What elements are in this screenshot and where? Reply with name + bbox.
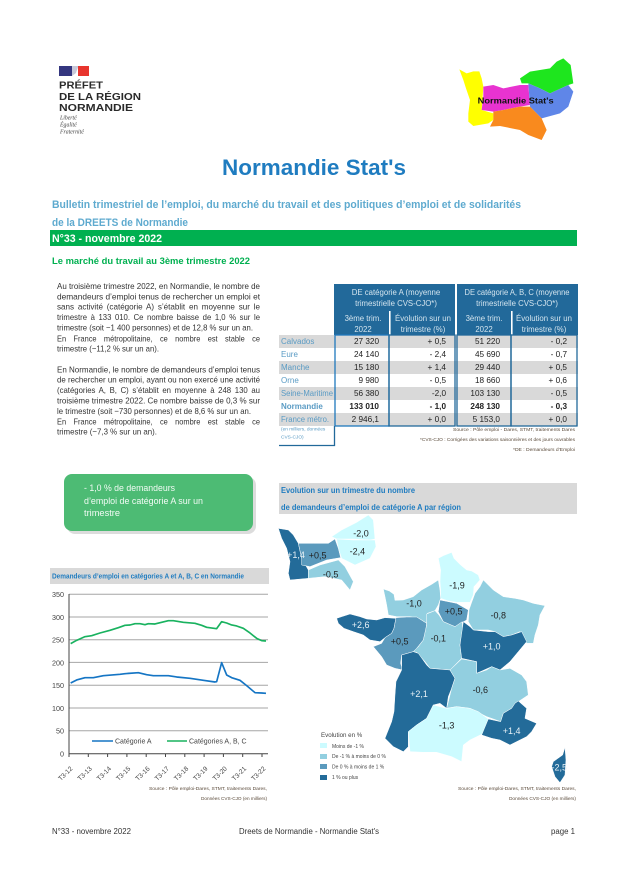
line chart: T3-22 bbox=[250, 765, 268, 783]
footer: Dreets de Normandie - Normandie Stat's bbox=[239, 827, 379, 836]
footer: N°33 - novembre 2022 bbox=[52, 827, 131, 836]
data table: + 0,0 bbox=[428, 415, 446, 424]
logo: Préfet de la région Normandie bbox=[59, 66, 141, 136]
map source bbox=[458, 786, 576, 802]
data table: 45 690 bbox=[475, 350, 500, 359]
logo: Préfet de la région Normandie: Égalité bbox=[59, 120, 77, 128]
data table: 103 130 bbox=[470, 389, 500, 398]
chart title: Demandeurs d’emploi en catégories A et A, B, C en Normandie bbox=[52, 572, 244, 580]
text block: labour market commentary: En France métropolitaine, ce nombre est stable ce bbox=[57, 416, 260, 426]
data table: - 2,4 bbox=[430, 350, 446, 359]
line chart: 150 bbox=[52, 681, 64, 690]
text block: labour market commentary: En France métropolitaine, ce nombre est stable ce bbox=[57, 333, 260, 343]
footer: page 1 bbox=[551, 827, 575, 836]
data table: Évolution sur un bbox=[516, 314, 572, 323]
line chart: 350 bbox=[52, 590, 64, 599]
map title bbox=[279, 483, 577, 514]
line chart: 200 bbox=[52, 658, 64, 668]
data table: - 0,7 bbox=[551, 350, 567, 359]
data table: + 0,5 bbox=[428, 337, 446, 346]
data table: 15 180 bbox=[354, 363, 379, 372]
subtitle: de la DREETS de Normandie bbox=[52, 217, 188, 229]
line chart: 100 bbox=[52, 704, 64, 713]
choropleth maps of Normandy and France bbox=[278, 515, 567, 783]
line chart: T3-14 bbox=[96, 765, 113, 783]
map value labels: -1,0 bbox=[406, 599, 422, 609]
logo: Préfet de la région Normandie: NORMANDIE bbox=[59, 103, 133, 114]
map value labels: +1,0 bbox=[483, 641, 501, 651]
title: Normandie Stat's bbox=[222, 155, 406, 180]
data table: 27 320 bbox=[354, 337, 379, 346]
callout bbox=[64, 474, 256, 534]
logo: Normandie Stat's map bbox=[459, 58, 573, 140]
data table: Manche bbox=[281, 363, 310, 372]
map legend: De 0 % à moins de 1 % bbox=[332, 764, 385, 770]
line chart: 50 bbox=[56, 726, 64, 736]
line chart: 250 bbox=[52, 636, 64, 644]
table sources: Source : Pôle emploi - Dares, STMT, traitements Dares bbox=[453, 427, 576, 433]
data table: Évolution sur un bbox=[395, 314, 451, 323]
data table: Seine-Maritime bbox=[281, 389, 334, 398]
data table: trimestre (%) bbox=[522, 325, 567, 334]
data table: trimestrielle CVS-CJO*) bbox=[355, 299, 437, 308]
section heading: Le marché du travail au 3ème trimestre 2022 bbox=[52, 256, 250, 267]
logo: Normandie Stat's map: Normandie Stat's bbox=[478, 95, 554, 105]
data table: DE catégorie A, B, C (moyenne bbox=[464, 288, 570, 297]
map value labels: -1,9 bbox=[449, 580, 465, 590]
data table: 9 980 bbox=[358, 376, 379, 385]
text block: labour market commentary: demandeurs d’emploi tenus de rechercher un emploi et bbox=[57, 291, 261, 301]
text block: labour market commentary: trimestre à 133 010. Ce nombre baisse de 1,0 % sur le bbox=[57, 312, 260, 322]
callout: trimestre bbox=[84, 508, 120, 518]
data table: Eure bbox=[281, 350, 298, 359]
line chart: T3-21 bbox=[231, 765, 248, 783]
map legend: De -1 % à moins de 0 % bbox=[332, 754, 386, 760]
text block: labour market commentary: de rechercher un emploi, ayant ou non exercé une activité bbox=[57, 374, 260, 384]
map value labels: +2,6 bbox=[352, 620, 370, 630]
data table: -2,0 bbox=[432, 389, 446, 398]
map value labels: +1,4 bbox=[503, 726, 521, 736]
data table: - 0,5 bbox=[430, 376, 446, 385]
data table: 2022 bbox=[354, 325, 372, 334]
logo: Préfet de la région Normandie: Liberté bbox=[59, 116, 77, 122]
data table: 133 010 bbox=[349, 402, 379, 411]
table sources: *CVS-CJO : Corrigées des variations saisonnières et des jours ouvrables bbox=[420, 437, 576, 443]
data table: Calvados bbox=[281, 337, 314, 346]
map source: Source : Pôle emploi-Dares, STMT, traitements Dares, bbox=[458, 786, 576, 792]
line chart: T3-13 bbox=[77, 765, 94, 783]
logo: Préfet de la région Normandie: PRÉFET bbox=[59, 78, 103, 92]
map: Normandy departments bbox=[278, 515, 376, 590]
data table: - 0,2 bbox=[551, 337, 567, 346]
map value labels: -0,8 bbox=[491, 610, 506, 620]
map legend: Evolution en % bbox=[321, 732, 363, 739]
data table: 3ème trim. bbox=[345, 314, 381, 323]
map value labels: -1,3 bbox=[439, 720, 454, 730]
map source: Données CVS-CJO (en milliers) bbox=[509, 796, 576, 802]
logo: Préfet de la région Normandie: Fraternité bbox=[59, 130, 84, 136]
data table: Orne bbox=[281, 376, 299, 385]
map value labels: -0,5 bbox=[323, 569, 338, 579]
data table: 29 440 bbox=[475, 363, 500, 372]
data table: 18 660 bbox=[475, 376, 500, 385]
line chart: T3-15 bbox=[115, 765, 133, 783]
data table: trimestre (%) bbox=[401, 325, 446, 334]
map title: de demandeurs d’emploi de catégorie A par région bbox=[281, 503, 461, 512]
data table: 248 130 bbox=[470, 402, 500, 411]
callout: - 1,0 % de demandeurs bbox=[84, 483, 176, 493]
text block: labour market commentary: trimestre (−7,3 % sur un an). bbox=[57, 427, 157, 437]
data table: 3ème trim. bbox=[466, 314, 502, 323]
map value labels: +0,5 bbox=[445, 606, 463, 616]
table sources bbox=[420, 427, 576, 453]
map value labels: -0,1 bbox=[431, 634, 446, 644]
line chart: Catégories A, B, C bbox=[189, 738, 247, 746]
data table: + 1,4 bbox=[428, 363, 446, 372]
map value labels: +0,5 bbox=[309, 550, 327, 560]
data table: 5 153,0 bbox=[473, 415, 500, 424]
data table: - 0,5 bbox=[551, 389, 567, 398]
line chart: T3-18 bbox=[173, 765, 190, 783]
data table: Normandie bbox=[281, 402, 323, 411]
map title: Evolution sur un trimestre du nombre bbox=[281, 486, 416, 495]
line chart: T3-19 bbox=[192, 765, 210, 783]
line chart: 0 bbox=[60, 750, 64, 758]
subtitle: Bulletin trimestriel de l’emploi, du marché du travail et des politiques d’emploi et de solidarités bbox=[52, 199, 521, 211]
data table: trimestrielle CVS-CJO*) bbox=[476, 299, 558, 308]
line chart: T3-17 bbox=[154, 765, 171, 783]
data table: + 0,6 bbox=[549, 376, 567, 385]
data table: 2 946,1 bbox=[352, 415, 379, 424]
table sources: *DE : Demandeurs d’Emploi bbox=[513, 447, 575, 453]
data table: + 0,5 bbox=[549, 363, 567, 372]
text block: labour market commentary: trimestre (−11,2 % sur un an). bbox=[57, 344, 159, 354]
text block: labour market commentary: (catégories A, B, C) s’établit en moyenne à 248 130 au bbox=[57, 385, 260, 395]
map legend: 1 % ou plus bbox=[332, 775, 359, 781]
data table: - 0,3 bbox=[551, 402, 567, 411]
text block: labour market commentary: le trimestre (soit −730 personnes) et de 8,6 % sur un an. bbox=[57, 406, 251, 416]
data table bbox=[279, 284, 578, 446]
data table: 24 140 bbox=[354, 350, 379, 359]
data table: (en milliers, données bbox=[281, 426, 326, 432]
text block: labour market commentary: trimestre (soit −1 400 personnes) et de 12,8 % sur un an. bbox=[57, 322, 253, 332]
data table: France métro. bbox=[281, 415, 329, 424]
map legend: Moins de -1 % bbox=[332, 744, 365, 750]
logo: Préfet de la région Normandie: DE LA RÉGION bbox=[59, 90, 141, 103]
map value labels: +1,4 bbox=[287, 550, 305, 560]
map: French regions bbox=[337, 552, 566, 783]
data table: 56 380 bbox=[354, 389, 379, 398]
text block: labour market commentary bbox=[57, 281, 261, 437]
text block: labour market commentary: sans activité (catégorie A) s’établit en moyenne sur le bbox=[57, 302, 260, 312]
data table: 51 220 bbox=[475, 337, 500, 346]
data table: 2022 bbox=[475, 325, 493, 334]
map value labels: -2,5 bbox=[552, 762, 567, 772]
map legend bbox=[320, 732, 386, 781]
subtitle bbox=[52, 199, 521, 229]
data table: + 0,0 bbox=[549, 415, 567, 424]
line chart: Catégorie A bbox=[115, 738, 152, 746]
text block: labour market commentary: En Normandie, le nombre de demandeurs d’emploi tenus bbox=[57, 364, 260, 374]
map value labels bbox=[287, 529, 567, 772]
data table: - 1,0 bbox=[430, 402, 446, 411]
line chart: T3-16 bbox=[134, 765, 152, 783]
text block: labour market commentary: Au troisième trimestre 2022, en Normandie, le nombre de bbox=[57, 281, 260, 291]
map value labels: +2,1 bbox=[410, 689, 428, 699]
issue banner: N°33 - novembre 2022 bbox=[52, 233, 162, 245]
footer bbox=[52, 827, 575, 836]
chart source: Données CVS-CJO (en milliers) bbox=[201, 796, 267, 802]
text block: labour market commentary: troisième trimestre 2022. Ce nombre baisse de 0,3 % sur bbox=[57, 395, 260, 405]
callout: d’emploi de catégorie A sur un bbox=[84, 496, 203, 506]
data table: CVS-CJO) bbox=[281, 434, 304, 440]
chart title bbox=[50, 568, 269, 584]
map value labels: -0,6 bbox=[473, 685, 488, 695]
line chart: T3-20 bbox=[212, 765, 229, 783]
chart source: Source : Pôle emploi-Dares, STMT, traitements Dares, bbox=[149, 786, 267, 792]
data table: DE catégorie A (moyenne bbox=[352, 288, 440, 297]
map value labels: -2,0 bbox=[353, 529, 369, 539]
line chart: T3-12 bbox=[57, 765, 75, 783]
issue banner bbox=[50, 230, 577, 246]
map value labels: -2,4 bbox=[350, 547, 365, 557]
map value labels: +0,5 bbox=[391, 637, 409, 647]
line chart: 300 bbox=[52, 613, 64, 622]
line chart bbox=[52, 590, 268, 783]
chart source bbox=[149, 786, 267, 802]
